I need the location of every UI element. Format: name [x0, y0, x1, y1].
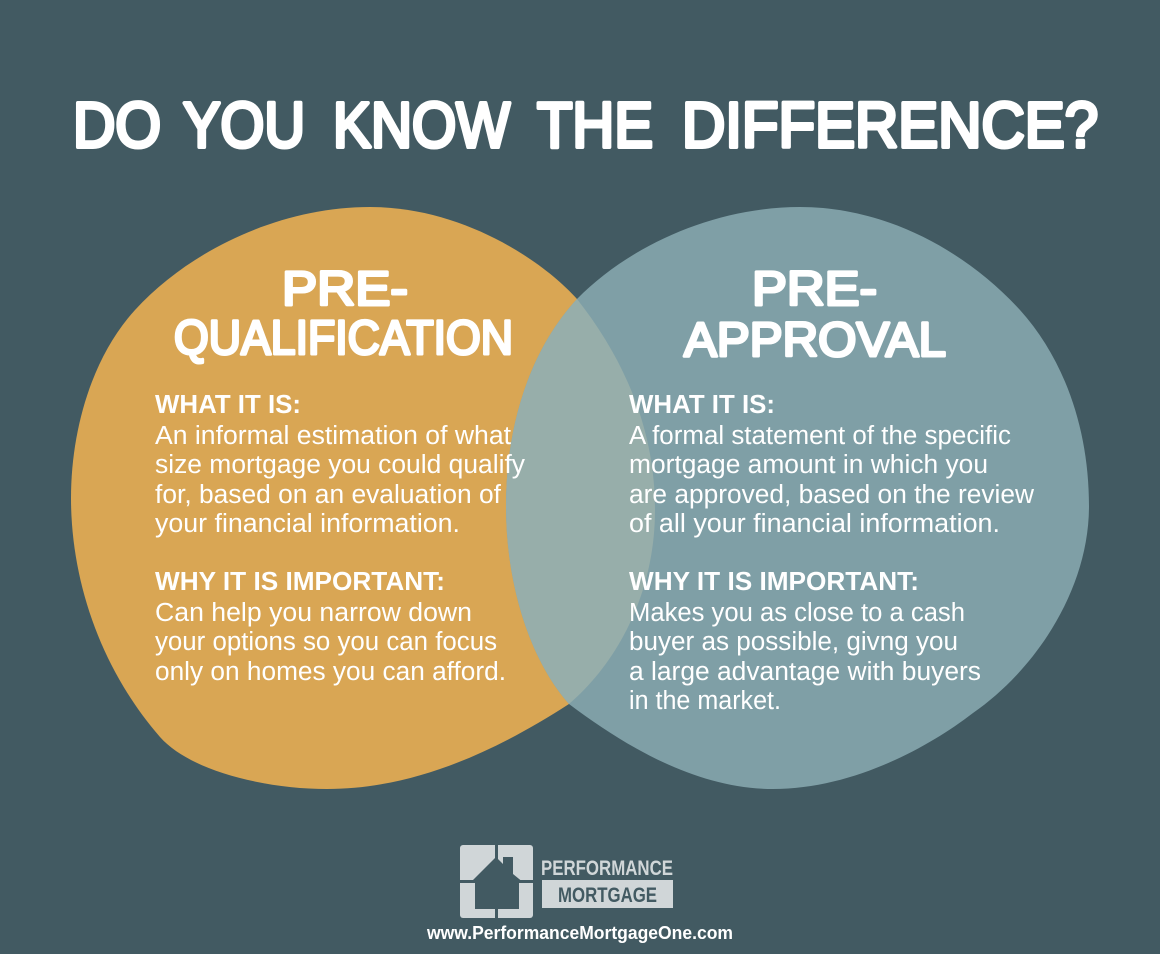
- heading: pre-qualification: PRE-: [282, 263, 408, 316]
- text block: pre-qualification why it is important: Can help you narrow down: [155, 599, 472, 627]
- heading: pre-approval: [684, 263, 946, 367]
- website url: www.PerformanceMortgageOne.com: [426, 923, 733, 943]
- title: THE: [537, 89, 653, 161]
- text block: pre-qualification what it is: for, based on an evaluation of: [155, 481, 502, 509]
- title: YOU: [183, 89, 305, 161]
- title: [73, 89, 1098, 161]
- text block: pre-approval what it is: A formal statement of the specific: [629, 422, 1011, 450]
- logo wordmark: MORTGAGE: [558, 884, 657, 907]
- venn diagram: [71, 207, 1089, 789]
- text block: pre-approval why it is important: [629, 566, 981, 715]
- text block: pre-approval why it is important: in the market.: [629, 687, 781, 715]
- heading: pre-approval: APPROVAL: [684, 314, 946, 367]
- text block: pre-approval why it is important: WHY IT IS IMPORTANT:: [629, 566, 919, 596]
- heading: pre-approval: PRE-: [752, 263, 877, 316]
- text block: pre-qualification what it is: your financial information.: [155, 510, 460, 538]
- title: DIFFERENCE?: [682, 89, 1098, 161]
- text block: pre-qualification what it is: [155, 389, 525, 538]
- text block: pre-approval why it is important: Makes you as close to a cash: [629, 599, 965, 627]
- text block: pre-approval what it is: are approved, based on the review: [629, 481, 1035, 509]
- text block: pre-approval why it is important: a large advantage with buyers: [629, 658, 981, 686]
- text block: pre-approval what it is: [629, 389, 1035, 538]
- text block: pre-approval what it is: of all your financial information.: [629, 510, 1000, 538]
- text block: pre-approval what it is: WHAT IT IS:: [629, 389, 775, 419]
- logo: performance mortgage: [460, 845, 673, 918]
- title: KNOW: [333, 89, 511, 161]
- text block: pre-approval what it is: mortgage amount in which you: [629, 451, 988, 479]
- text block: pre-qualification why it is important: [155, 566, 506, 686]
- title: DO: [73, 89, 161, 161]
- logo wordmark: [541, 857, 673, 908]
- heading: pre-qualification: [174, 263, 513, 365]
- heading: pre-qualification: QUALIFICATION: [174, 312, 513, 365]
- circle: pre-approval: [506, 207, 1089, 789]
- logo wordmark: PERFORMANCE: [541, 857, 673, 880]
- text block: pre-qualification why it is important: only on homes you can afford.: [155, 658, 506, 686]
- text block: pre-approval why it is important: buyer as possible, givng you: [629, 628, 958, 656]
- text block: pre-qualification why it is important: your options so you can focus: [155, 628, 497, 656]
- text block: pre-qualification what it is: An informal estimation of what: [155, 422, 511, 450]
- text block: pre-qualification what it is: size mortgage you could qualify: [155, 451, 525, 479]
- icon: house mark: [460, 845, 533, 918]
- text block: pre-qualification what it is: WHAT IT IS:: [155, 389, 301, 419]
- circle: pre-qualification: [71, 207, 655, 789]
- text block: pre-qualification why it is important: WHY IT IS IMPORTANT:: [155, 566, 445, 596]
- overlap area: [506, 299, 655, 704]
